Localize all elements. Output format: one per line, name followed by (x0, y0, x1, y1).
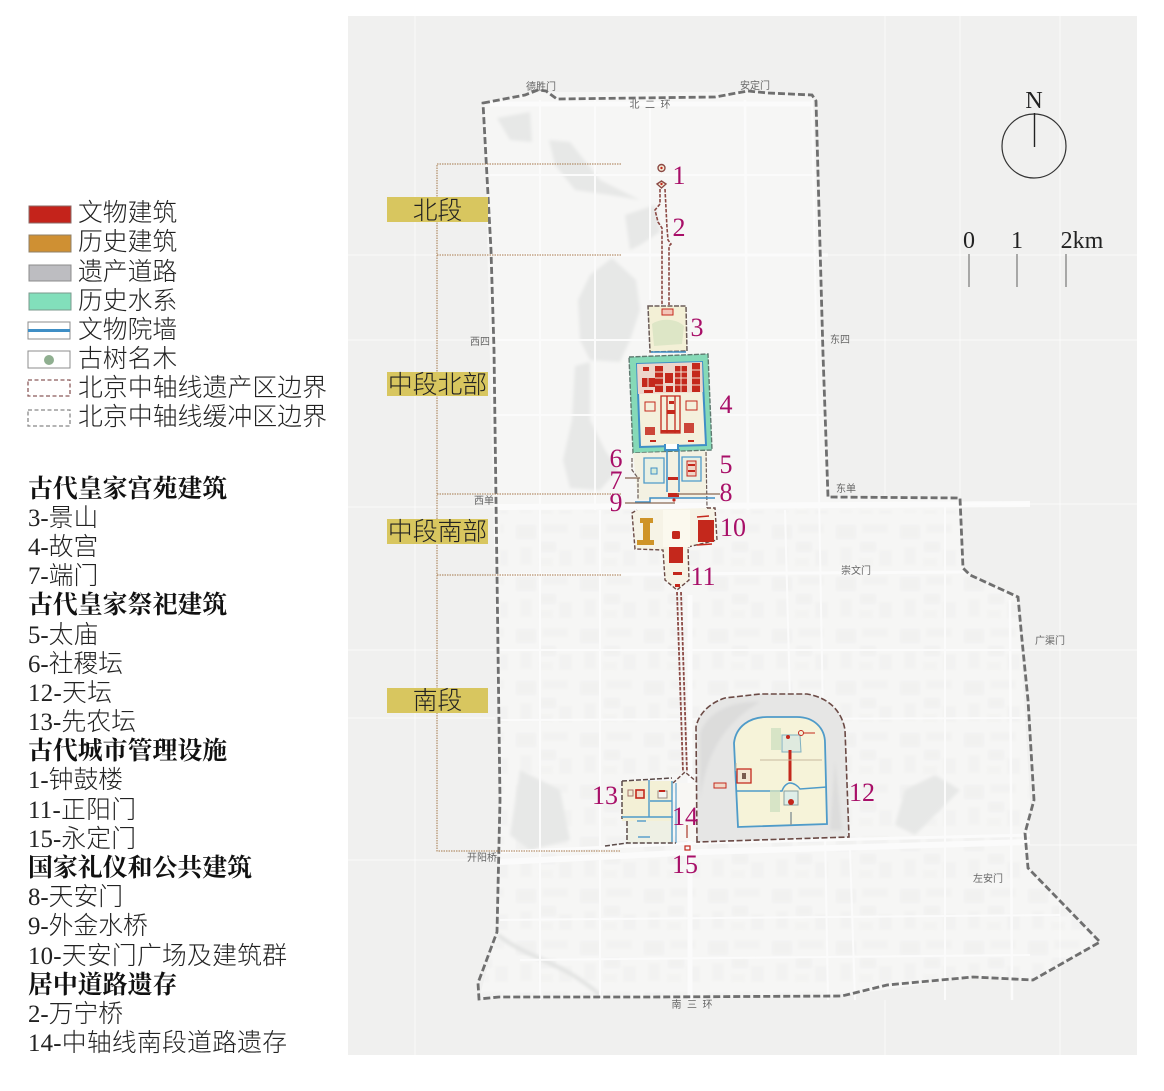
legend item: ancient and famous trees (28, 345, 177, 373)
list: management facilities: 15-永定门 (28, 825, 136, 853)
site number labels: 9 (610, 488, 622, 517)
place names: 西四 (470, 337, 490, 348)
place names (467, 79, 1065, 1011)
legend item: historic building (29, 228, 177, 256)
heading: central road remains: 居中道路遗存 (28, 971, 177, 999)
list: management facilities: 11-正阳门 (28, 796, 136, 824)
scale bar: 0 (963, 228, 975, 254)
site number labels: 6 (610, 444, 622, 473)
section label: north: 北段 (413, 197, 462, 225)
legend item: historic water system: 历史水系 (78, 287, 177, 315)
place names: 德胜门 (526, 80, 556, 93)
section label: south (387, 687, 488, 715)
site 13: Xiannongtan (605, 778, 676, 846)
place names: 安定门 (740, 79, 770, 92)
site number labels: 2 (672, 213, 686, 242)
legend item: buffer zone boundary: 北京中轴线缓冲区边界 (78, 403, 327, 431)
roads (490, 100, 1060, 1000)
list: imperial palaces: 3-景山 (28, 505, 98, 532)
place names: 崇文门 (841, 564, 871, 577)
sites 5-9: Shejitan, Taimiao, Duanmen, Tiananmen (632, 449, 715, 508)
list: ceremonial buildings: 8-天安门 (28, 883, 123, 911)
place names: 东四 (830, 333, 850, 346)
map base (348, 16, 1137, 1055)
heading: ancient city management facilities: 古代城市管理设施 (28, 737, 227, 765)
legend item: heritage road (29, 258, 177, 286)
legend item: ancient and famous trees: 古树名木 (78, 345, 177, 373)
heading: national ceremonial and public buildings: 国家礼仪和公共建筑 (28, 853, 252, 882)
section label: north (387, 197, 488, 225)
place names: 西单 (474, 495, 494, 507)
leader lines (625, 478, 720, 503)
list: management facilities (28, 766, 136, 853)
legend item: heritage road: 遗产道路 (78, 258, 177, 286)
place names: 左安门 (973, 872, 1003, 885)
site number labels: 12 (849, 778, 875, 807)
section label: central north: 中段北部 (388, 371, 487, 399)
site 10-11: Tiananmen Square and Zhengyangmen (632, 508, 717, 590)
section bracket lines (437, 164, 621, 851)
site number labels: 1 (672, 161, 686, 190)
list: road remains: 14-中轴线南段道路遗存 (28, 1029, 287, 1057)
list: sacrificial buildings: 5-太庙 (28, 621, 98, 649)
site number labels: 4 (720, 390, 732, 419)
compass (1002, 88, 1066, 178)
list: sacrificial buildings: 12-天坛 (28, 679, 112, 707)
legend item: cultural relic building: 文物建筑 (78, 199, 177, 227)
legend item: historic building: 历史建筑 (78, 228, 177, 256)
site number labels: 7 (610, 466, 622, 495)
compass: N (1025, 88, 1043, 114)
list: road remains: 2-万宁桥 (28, 1000, 123, 1028)
heritage list (28, 474, 287, 1057)
place names: 开阳桥 (467, 852, 497, 864)
scale bar: 2km (1061, 228, 1104, 254)
list: sacrificial buildings (28, 621, 136, 736)
south axis road remains (677, 592, 687, 772)
site number labels: 15 (672, 850, 698, 879)
site number labels: 5 (720, 450, 732, 479)
list: ceremonial buildings: 10-天安门广场及建筑群 (28, 942, 287, 970)
list: management facilities: 1-钟鼓楼 (28, 766, 123, 794)
legend item: cultural relic courtyard wall: 文物院墙 (78, 316, 177, 344)
faint outer roads (348, 16, 1137, 1055)
place names: 南 三 环 (671, 998, 713, 1011)
legend (28, 199, 327, 431)
site number labels: 8 (720, 478, 732, 507)
legend item: cultural relic building (29, 199, 177, 227)
heading: imperial palaces and gardens: 古代皇家宫苑建筑 (28, 474, 227, 503)
scale bar: 1 (1011, 228, 1023, 254)
list: sacrificial buildings: 6-社稷坛 (28, 650, 123, 678)
list: imperial palaces: 7-端门 (28, 562, 98, 590)
map (348, 16, 1137, 1055)
buffer zone boundary (478, 90, 1100, 999)
site number labels (592, 161, 875, 879)
site number labels: 14 (672, 802, 698, 831)
scale bar (963, 228, 1104, 287)
place names: 北 二 环 (629, 99, 671, 111)
legend item: cultural relic courtyard wall (28, 316, 177, 344)
site number labels: 10 (720, 513, 746, 542)
list: road remains (28, 1000, 287, 1057)
site 4: Forbidden City (629, 354, 712, 453)
palace block detail lines (648, 366, 700, 392)
site number labels: 11 (690, 562, 716, 591)
legend item: heritage area boundary: 北京中轴线遗产区边界 (78, 374, 327, 402)
list: sacrificial buildings: 13-先农坛 (28, 708, 136, 736)
site 1-2: bell and drum towers, Wanning bridge (655, 164, 671, 305)
list: imperial palaces (28, 505, 98, 590)
water bodies (497, 112, 960, 995)
site number labels: 3 (690, 313, 704, 342)
legend item: historic water system (29, 287, 177, 315)
heading: imperial sacrificial buildings: 古代皇家祭祀建筑 (28, 590, 227, 619)
list: imperial palaces: 4-故宫 (28, 533, 98, 561)
section label: south: 南段 (413, 687, 462, 715)
site 12: Temple of Heaven (696, 694, 849, 842)
list: ceremonial buildings: 9-外金水桥 (28, 912, 148, 940)
site 14-15: south axis and Yongdingmen (673, 772, 697, 850)
place names: 东单 (836, 482, 856, 495)
site number labels: 13 (592, 781, 618, 810)
section label: central south: 中段南部 (388, 518, 487, 546)
place names: 广渠门 (1035, 634, 1065, 647)
list: ceremonial buildings (28, 883, 287, 970)
site 3: Jingshan (648, 306, 687, 352)
